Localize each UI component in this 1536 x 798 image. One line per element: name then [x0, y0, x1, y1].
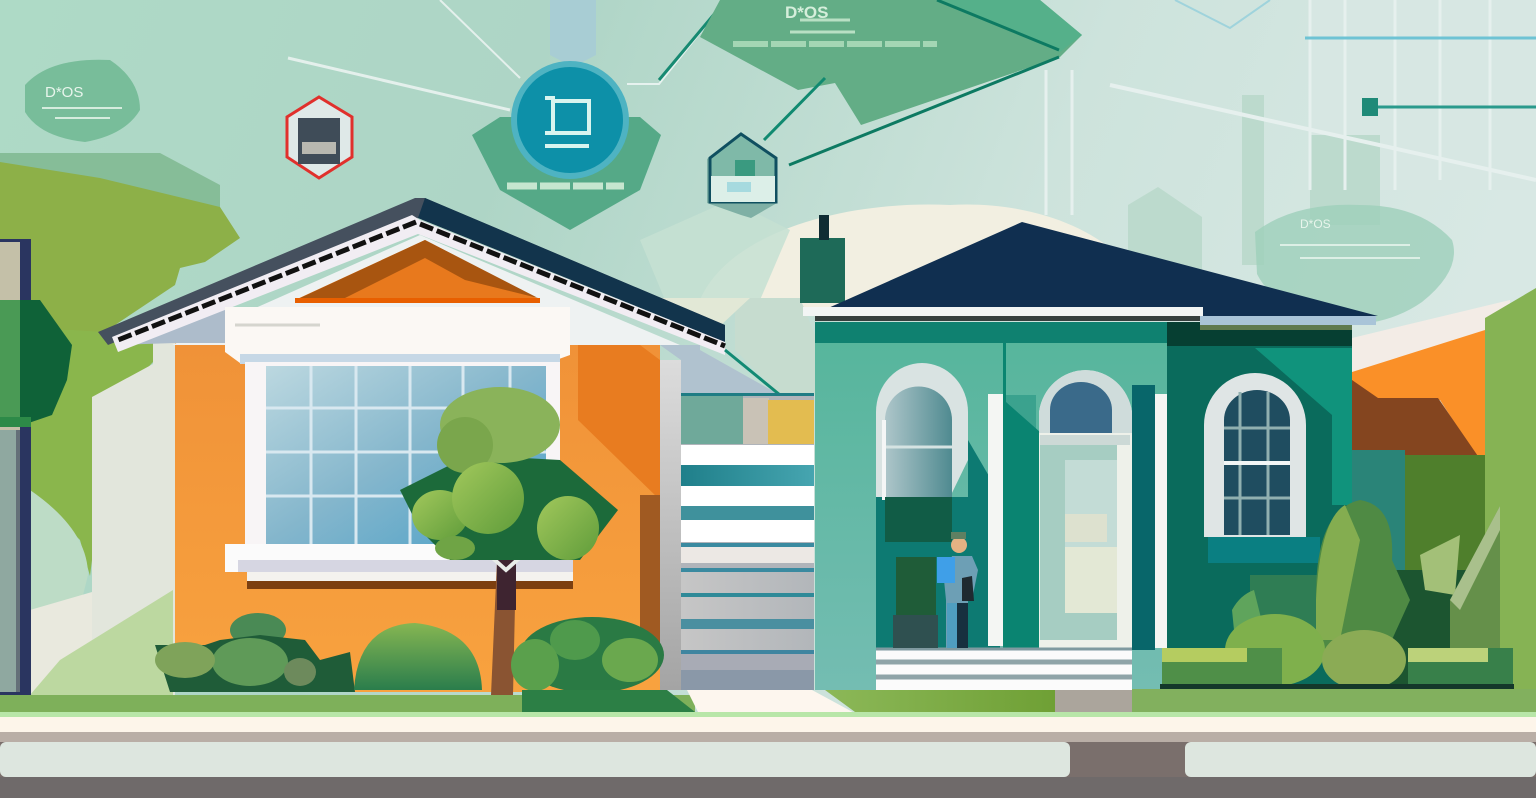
right wing: [1167, 342, 1352, 690]
left edge tree and building: [0, 239, 72, 695]
roof: [98, 198, 780, 395]
arched window right: [1204, 373, 1320, 563]
porch steps: [876, 648, 1132, 690]
info bubble: left: [25, 60, 140, 142]
top info nodes: [25, 0, 1454, 325]
right side orange building and greenery: [1352, 288, 1536, 708]
connector: bubble lines: [764, 0, 1059, 165]
connector lines: [288, 0, 1536, 116]
house: orange: [98, 198, 814, 692]
side column: [660, 360, 681, 690]
gable: [172, 235, 680, 345]
walkway: [687, 690, 860, 716]
pale top pillar: [550, 0, 596, 67]
panel: right translucent bubble: D*OS: [1300, 217, 1331, 231]
icon: small hexagon badge: [707, 133, 777, 218]
dark teal window recess: [876, 440, 1000, 648]
arched door: [1039, 370, 1132, 648]
wall shadow band: [578, 345, 660, 500]
striped shutter wall: [681, 393, 814, 690]
roof: [810, 222, 1378, 316]
panel: right translucent bubble: [1255, 205, 1454, 325]
house: teal: [800, 215, 1378, 690]
large window: [225, 362, 573, 589]
window header: [225, 307, 570, 363]
lawn: [0, 689, 1536, 712]
bushes right: [1160, 500, 1514, 690]
trim: [815, 322, 1352, 343]
icon: red hexagon badge: [287, 97, 352, 178]
info bubble: left: D*OS: [45, 84, 83, 101]
pavement and road: [0, 712, 1536, 798]
arched window left: [876, 363, 968, 542]
chimney: [800, 238, 845, 303]
eave trim: [803, 307, 1203, 316]
bushes left: [155, 613, 664, 693]
person: [893, 532, 978, 648]
panel: green leaf under central node: [472, 117, 661, 230]
body: [815, 322, 1167, 690]
column: [988, 394, 1003, 646]
panel: top green speech bubble: [700, 0, 1082, 125]
icon: central teal circle: [511, 61, 629, 179]
roof underside: [118, 298, 225, 345]
wall: [175, 343, 660, 692]
background skyline and glow: [640, 0, 1536, 395]
panel: top green speech bubble: D*OS: [785, 3, 828, 22]
tree in front of orange house: [400, 387, 618, 695]
left green foliage backdrop: [0, 153, 240, 695]
